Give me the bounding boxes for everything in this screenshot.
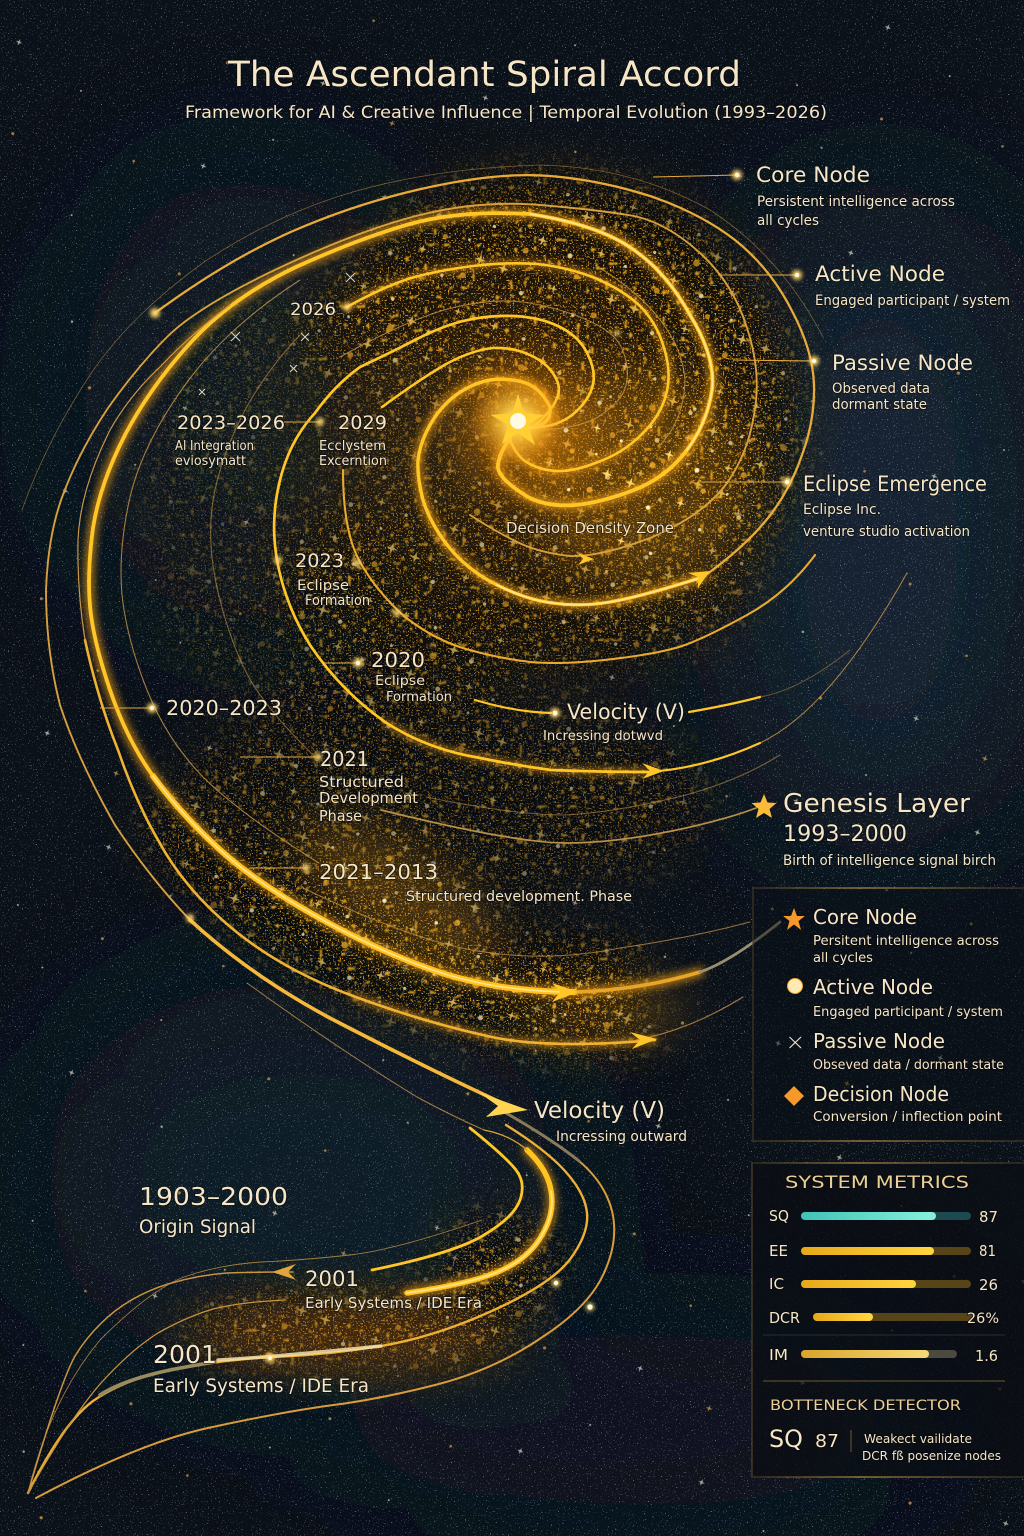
callout: eclipse emergence: venture studio activation [803,524,970,540]
arm: lower S curve three [28,1125,587,1493]
metric: DCR: 26% [967,1311,999,1327]
label: 2021: 2021 [320,747,369,771]
label: 2023–2026 [175,412,285,469]
label: 2021: Phase [319,807,362,825]
legend item: passive node: Obseved data / dormant state [813,1057,1004,1073]
callout: core node: Core Node [756,163,870,188]
callout: active node [815,262,1010,309]
label: 2001 upper: 2001 [305,1267,359,1291]
callout: passive node: Observed data [832,381,930,397]
arm: second long arm [85,640,655,1044]
label: 2001 lower: Early Systems / IDE Era [153,1375,369,1397]
callout: active node: Engaged participant / system [815,293,1010,309]
label: 2029 [319,412,387,469]
legend item: passive node: Passive Node [813,1029,945,1053]
label: lower velocity: Incressing outward [556,1129,687,1145]
label: 2001 lower: 2001 [153,1340,217,1369]
arm: genesis line [381,808,756,843]
label: 2021: Development [319,789,418,807]
callout: core node: Persistent intelligence across [757,194,955,210]
label: upper velocity: Incressing dotwvd [543,729,663,744]
heading: system metrics: SYSTEM METRICS [785,1173,969,1193]
metric: IM [769,1346,998,1365]
metric: SQ: SQ [769,1207,789,1225]
arm: lower S curve thin top [484,1130,527,1150]
arm: second arm thin upper part [78,305,230,640]
arm: lower S curve bright [407,1150,552,1293]
legend item: core node [813,905,999,966]
arm: lower S curve one [372,1128,522,1270]
arm: early era tail [28,1300,285,1493]
legend item: core node: Core Node [813,905,917,929]
heading: bottleneck detector: BOTTENECK DETECTOR [770,1398,961,1414]
label: 2029: Ecclystem [319,439,386,454]
label: 2023–2026: 2023–2026 [177,412,285,434]
bottleneck readout: SQ [769,1425,803,1453]
arm: decision zone arc to far left [46,204,757,1017]
golden decision density cloud [111,137,835,1406]
label: 2029: Excerntion [319,454,387,469]
legend item: active node: Active Node [813,975,933,999]
arm: inner arm to upper-right arrow [418,379,703,605]
label: 2001 upper [305,1267,482,1312]
label: 2023–2026: AI Integration [175,439,254,454]
metric: IC: IC [769,1275,784,1293]
icon: passive cross [790,1037,801,1048]
arm: outermost bold segment to velocity arrow [190,920,500,1102]
label: 2023–2026: eviosymatt [175,454,246,469]
label: 2020: Eclipse [375,674,425,689]
icon: core star [783,908,805,930]
label: 2023: 2023 [295,550,344,572]
connector lines and node dots [100,170,819,1363]
genesis layer callout [752,789,996,869]
arm: short inner arm [382,348,559,427]
label: 2023: Formation [305,593,370,609]
metric: SQ [769,1207,998,1226]
arm: upper arc to 2026 [347,263,669,471]
label: origin signal: Origin Signal [139,1216,256,1238]
title [185,55,827,123]
arrow: 2001 leftward [272,1264,296,1280]
arm: main arm grey tail [700,922,780,972]
label: origin signal: 1903–2000 [139,1182,288,1211]
label: origin signal [139,1182,288,1238]
arm: leftward tail to arrow [28,1272,293,1493]
genesis layer callout: Genesis Layer [783,789,970,819]
label: 2020: Formation [386,690,452,705]
legend item: passive node [813,1029,1004,1073]
metric: DCR: DCR [769,1309,800,1327]
metric: DCR [769,1309,999,1327]
arm: thick main arm [89,213,713,992]
label: 2023: Eclipse [297,578,349,594]
label: 2001 lower [153,1340,369,1397]
label: 2020 [371,648,452,705]
label: decision density zone: Decision Density Zone [506,519,674,537]
arrow: second arm [630,1032,657,1049]
label: 2021–2013: 2021–2013 [319,860,438,884]
metric: IM: IM [769,1346,788,1364]
legend item: core node: Persitent intelligence across [813,933,999,949]
label: 2021–2013 [319,860,632,905]
icon: active dot [788,978,802,994]
icon: decision diamond [784,1086,804,1106]
bottleneck readout: DCR fß posenize nodes [862,1449,1001,1463]
callout: passive node: Passive Node [832,351,973,376]
legend item: active node: Engaged participant / system [813,1004,1003,1020]
arm: arc below decision zone [343,470,815,663]
callout: core node [756,163,955,229]
genesis layer callout: Birth of intelligence signal birch [783,853,996,869]
legend item: decision node: Conversion / inflection point [813,1109,1002,1125]
label: lower velocity: Velocity (V) [534,1098,665,1124]
metric: IC [769,1275,998,1294]
arm: lower S curve four [36,1161,614,1498]
bottleneck readout [769,1425,1001,1463]
title: The Ascendant Spiral Accord [227,55,741,95]
label: lower velocity [534,1098,687,1145]
callout: eclipse emergence: Eclipse Inc. [803,502,881,518]
label: upper velocity: Velocity (V) [567,700,685,724]
metric: EE [769,1242,996,1260]
icon: genesis star [752,794,776,818]
legend item: active node [813,975,1003,1020]
panel: system metrics [752,1163,1024,1477]
label: 2029: 2029 [338,412,387,434]
timeline labels [139,300,687,1397]
callout: passive node: dormant state [832,397,927,413]
arrow: mid arm [642,763,664,779]
callout: core node: all cycles [757,213,819,229]
arm: mid arm gold extension [649,743,760,772]
arm: mid arm to lower arrow [274,316,649,772]
arrow: main arm [552,983,578,1002]
label: 2021: Structured [319,773,404,791]
metric: SQ: 87 [979,1208,998,1226]
arm: tan segment of the lower curve [100,1362,215,1395]
arm: outer ring from the arrow [155,175,814,577]
arrows along the spiral [272,553,710,1280]
spiral: golden arms [28,175,815,1498]
label: 2023 [295,550,370,609]
arrow: decision zone [578,553,594,565]
spiral: bright cores of the main arms [153,214,713,1360]
spiral: glow under the golden arms [89,213,713,1293]
label: 2021–2013: Structured development. Phase [406,889,632,905]
subtitle: Framework for AI & Creative Influence | Temporal Evolution (1993–2026) [185,103,827,123]
label: 2021 [319,747,418,825]
arm: thick main arm lower swell [153,776,575,992]
callout: eclipse emergence: Eclipse Emergence [803,472,987,496]
label: 2026: 2026 [290,300,336,320]
arrow: velocity outward [478,1092,528,1117]
bottleneck readout: Weakect vailidate [864,1432,972,1446]
legend item: decision node [813,1082,1002,1125]
label: upper velocity [543,700,685,744]
central core star [469,373,565,469]
metric: IC: 26 [979,1276,998,1294]
panel: node legend [752,888,1024,1141]
spiral: thin orbit lines [22,165,907,1493]
metric: EE: EE [769,1242,788,1260]
genesis layer callout: 1993–2000 [783,822,907,847]
legend item: core node: all cycles [813,950,873,966]
arrow: inner arm [688,571,710,588]
callout: eclipse emergence [803,472,987,540]
metric: IM: 1.6 [975,1347,998,1365]
callout: passive node [832,351,973,413]
label: 2020–2023: 2020–2023 [166,696,282,720]
arm: grey band into velocity arrow [506,1113,579,1161]
legend item: decision node: Decision Node [813,1082,949,1106]
metric: EE: 81 [979,1242,996,1260]
bottleneck readout: 87 [815,1431,839,1452]
arm: main arm gold tail [575,972,700,992]
label: 2020: 2020 [371,648,425,672]
arm: upper velocity segments [475,697,760,713]
label: 2001 upper: Early Systems / IDE Era [305,1294,482,1312]
callout: active node: Active Node [815,262,945,287]
